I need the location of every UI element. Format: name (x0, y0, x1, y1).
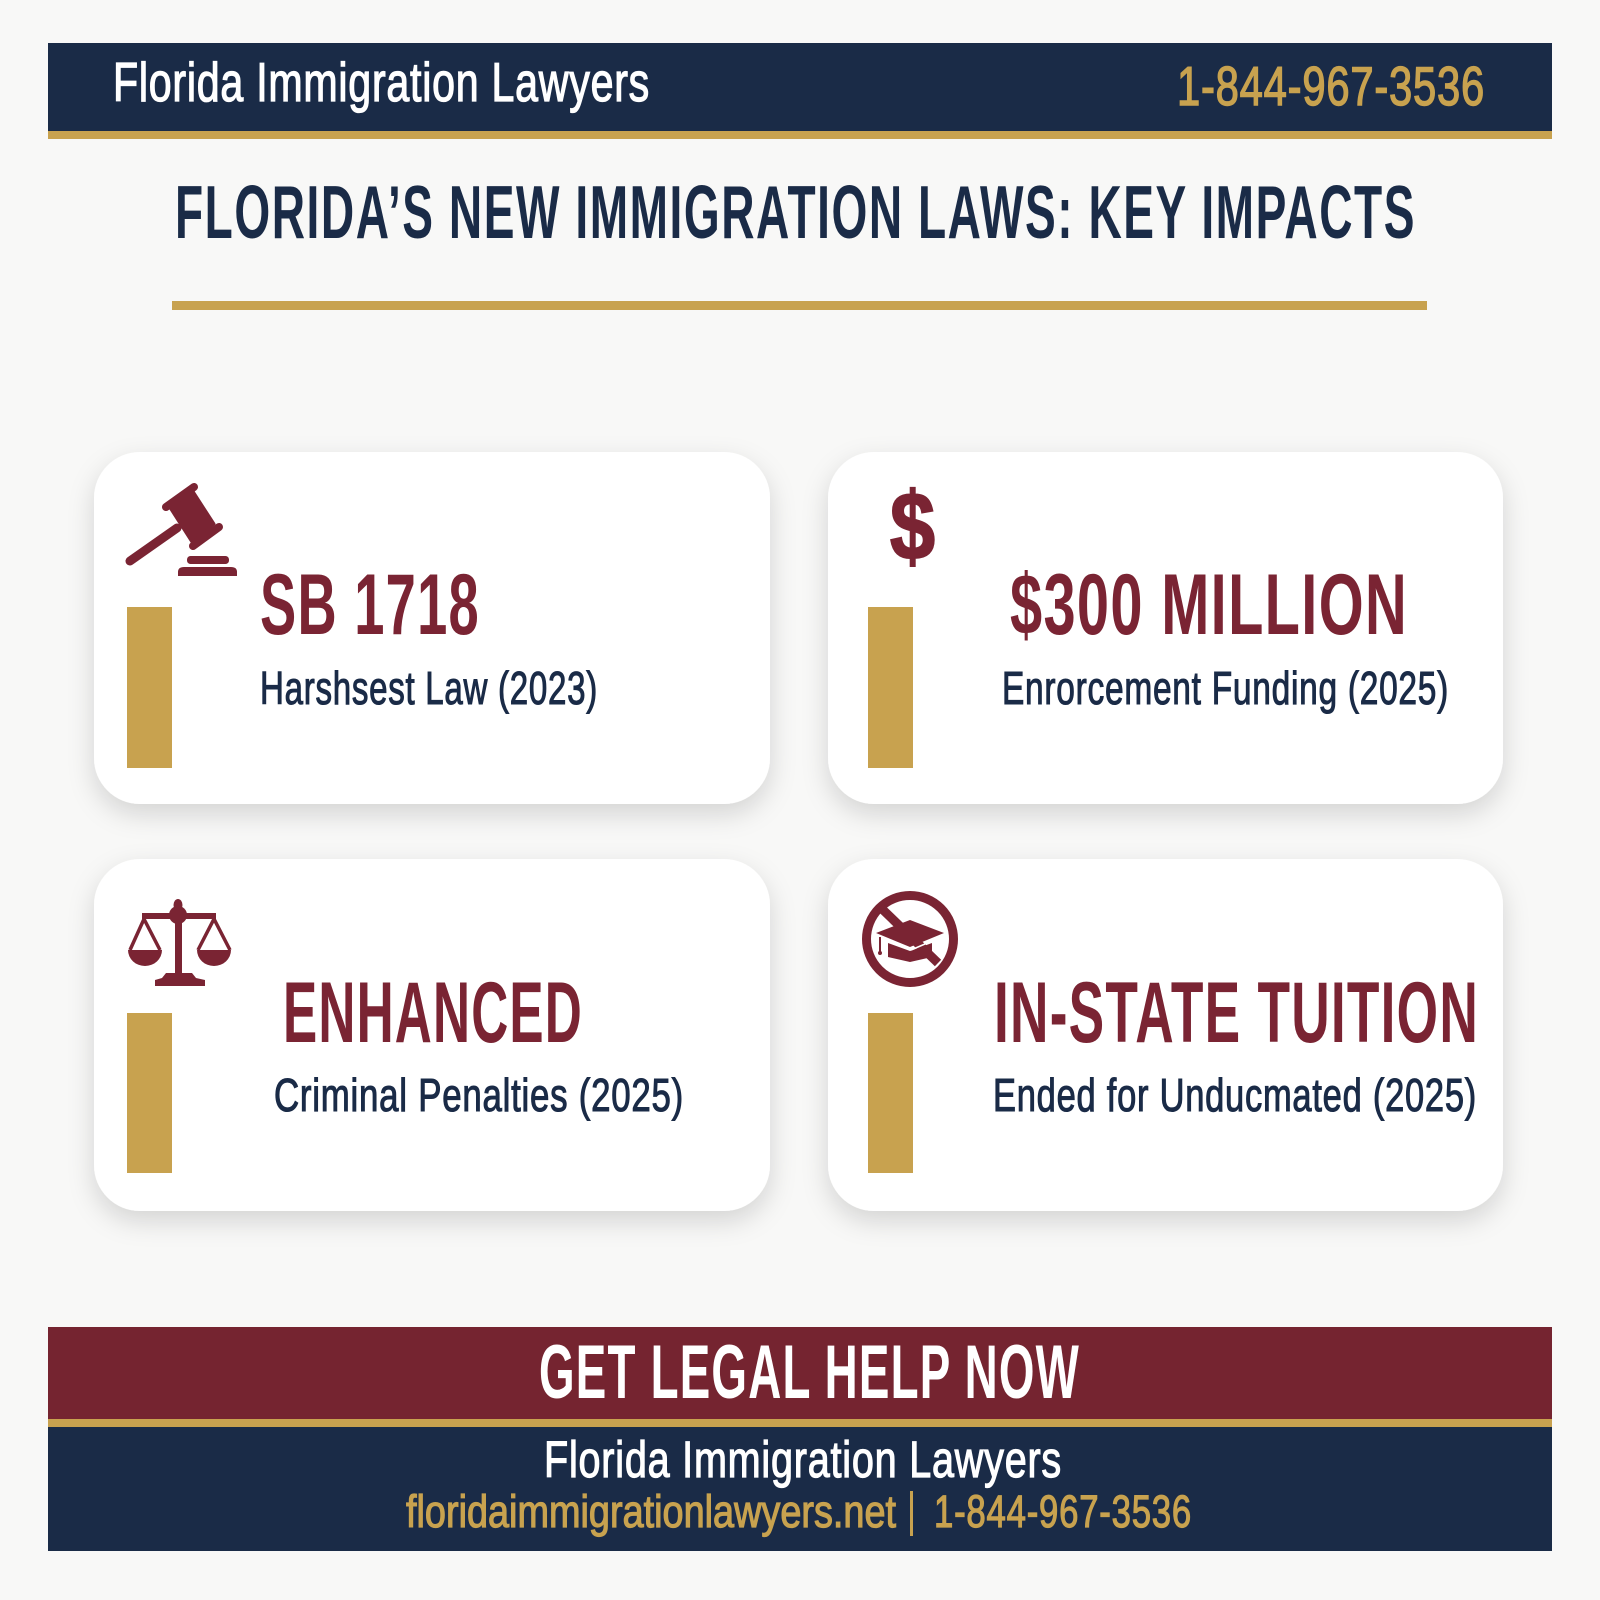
description: Harshsest Law (2023) (260, 662, 598, 714)
call to action banner (48, 1327, 1552, 1419)
phone number: 1-844-967-3536 (1177, 55, 1485, 117)
separator (910, 1491, 913, 1536)
accent bar (127, 607, 172, 768)
icon: scales of justice (128, 899, 231, 986)
call to action text: GET LEGAL HELP NOW (539, 1330, 1080, 1415)
stat: ENHANCED (283, 965, 583, 1061)
icon: gavel (130, 487, 237, 576)
website: floridaimmigrationlawyers.net (406, 1486, 896, 1537)
panel: enhanced penalties (94, 859, 770, 1211)
stat: SB 1718 (260, 557, 480, 653)
firm name: Florida Immigration Lawyers (544, 1431, 1062, 1488)
footer contact panel (48, 1427, 1552, 1551)
footer divider (48, 1419, 1552, 1427)
accent bar (868, 1013, 913, 1173)
panel: in-state tuition (828, 859, 1503, 1211)
phone number: 1-844-967-3536 (934, 1486, 1192, 1537)
firm name: Florida Immigration Lawyers (113, 51, 650, 113)
icon: dollar sign: $ (890, 473, 935, 580)
description: Enrorcement Funding (2025) (1002, 662, 1449, 714)
header bar (48, 43, 1552, 139)
title underline (172, 301, 1427, 310)
icon: prohibited graduation cap (866, 896, 954, 982)
stat: $300 MILLION (1010, 557, 1408, 653)
accent bar (868, 607, 913, 768)
panel: SB 1718 (94, 452, 770, 804)
panel: $300 million (828, 452, 1503, 804)
accent bar (127, 1013, 172, 1173)
description: Criminal Penalties (2025) (274, 1069, 684, 1121)
